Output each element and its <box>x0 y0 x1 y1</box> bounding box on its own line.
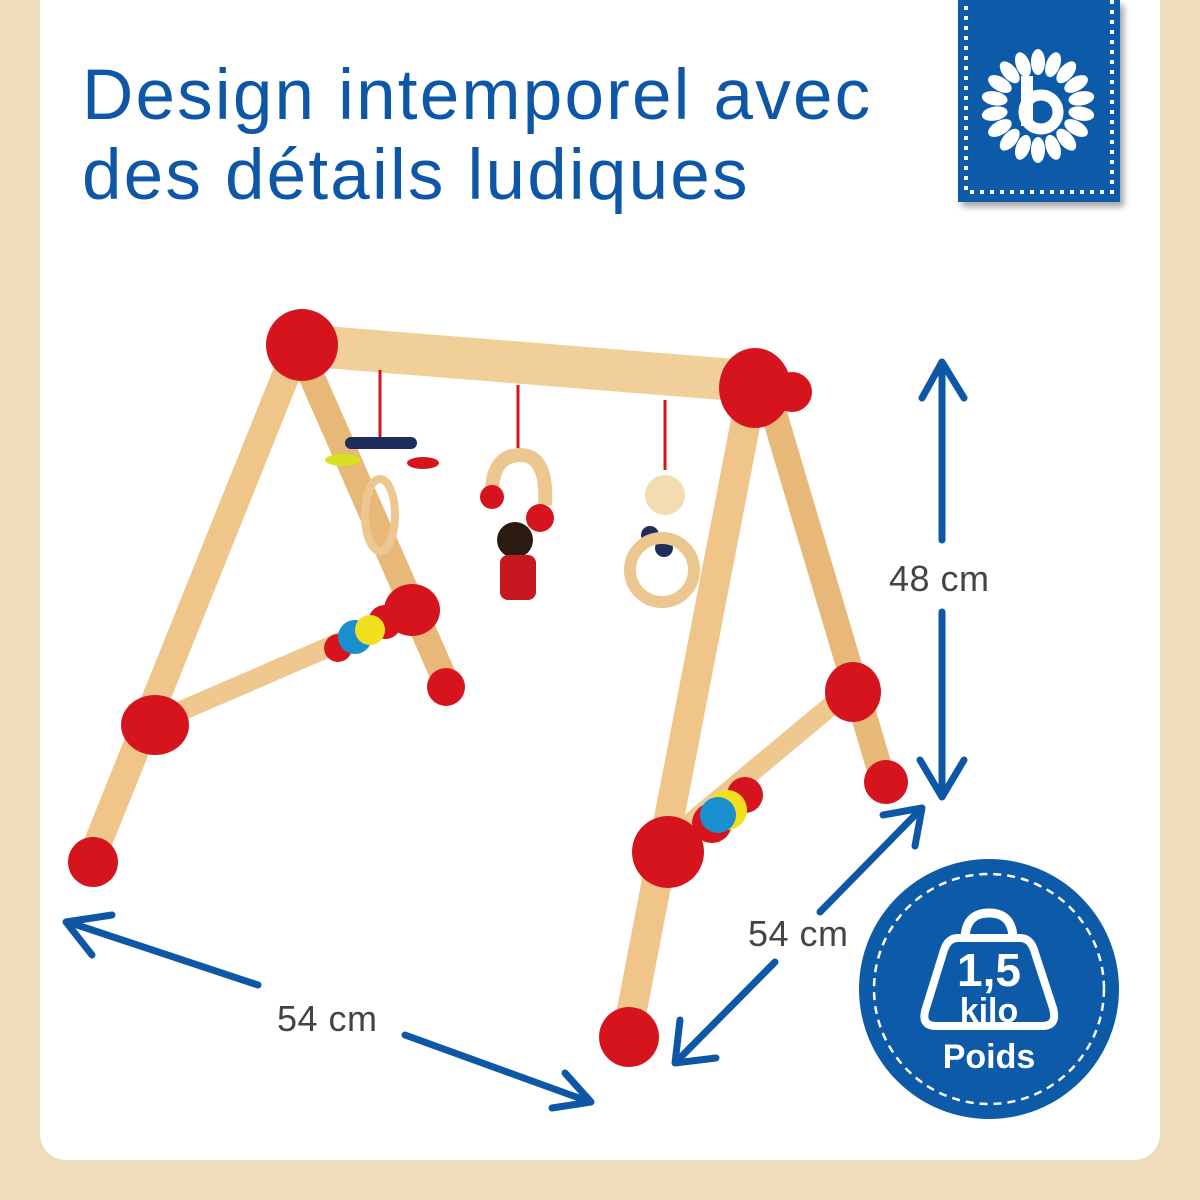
label: depth: 54 cm <box>748 913 849 954</box>
weight badge: kilo <box>960 992 1018 1030</box>
title: Design intemporel avec <box>82 56 872 135</box>
title <box>82 56 872 215</box>
label: width: 54 cm <box>277 998 378 1039</box>
weight badge: 1,5 <box>957 944 1021 996</box>
label: height: 48 cm <box>889 558 990 599</box>
title: des détails ludiques <box>82 136 750 215</box>
weight badge <box>859 859 1119 1119</box>
weight badge: Poids <box>943 1038 1035 1076</box>
logo badge <box>958 0 1120 202</box>
